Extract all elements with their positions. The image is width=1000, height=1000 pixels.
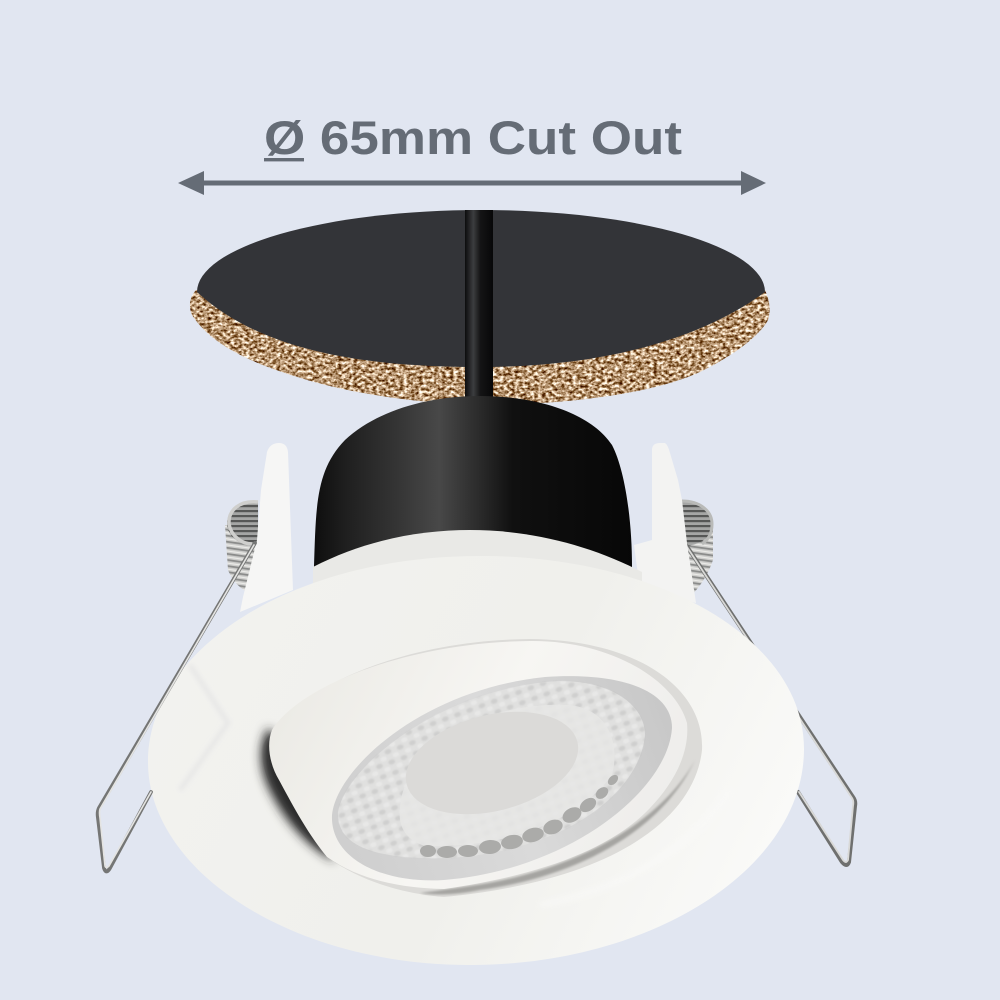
recess shadow lower — [420, 760, 695, 894]
LED beads — [420, 773, 620, 858]
left spring wire — [98, 543, 255, 872]
right mounting spring — [682, 500, 713, 596]
flange lower ridge — [540, 790, 730, 905]
ceiling board cut-out — [190, 210, 770, 405]
title: cut out dimension: Ø 65mm Cut Out — [264, 111, 682, 164]
left mounting spring — [225, 501, 258, 594]
flange reflection — [180, 665, 228, 790]
housing collar — [313, 530, 642, 610]
white bezel flange — [148, 556, 804, 965]
right white clip — [634, 443, 696, 603]
reflector lens cover — [400, 705, 615, 846]
central lens disc — [406, 712, 578, 814]
recess shadow — [261, 728, 335, 862]
left white clip — [240, 443, 293, 612]
adjustable gimbal — [269, 641, 687, 889]
reflector — [338, 681, 645, 858]
board edge: chipboard texture — [190, 290, 770, 405]
dimension arrow — [178, 171, 766, 195]
right spring wire — [686, 545, 855, 865]
black driver housing — [314, 396, 632, 580]
lens outer ring — [332, 676, 672, 880]
board top surface — [197, 210, 765, 367]
recess — [262, 639, 702, 897]
cable rod — [465, 210, 493, 402]
reflector dimples — [338, 681, 645, 858]
LED lens assembly — [332, 676, 672, 880]
